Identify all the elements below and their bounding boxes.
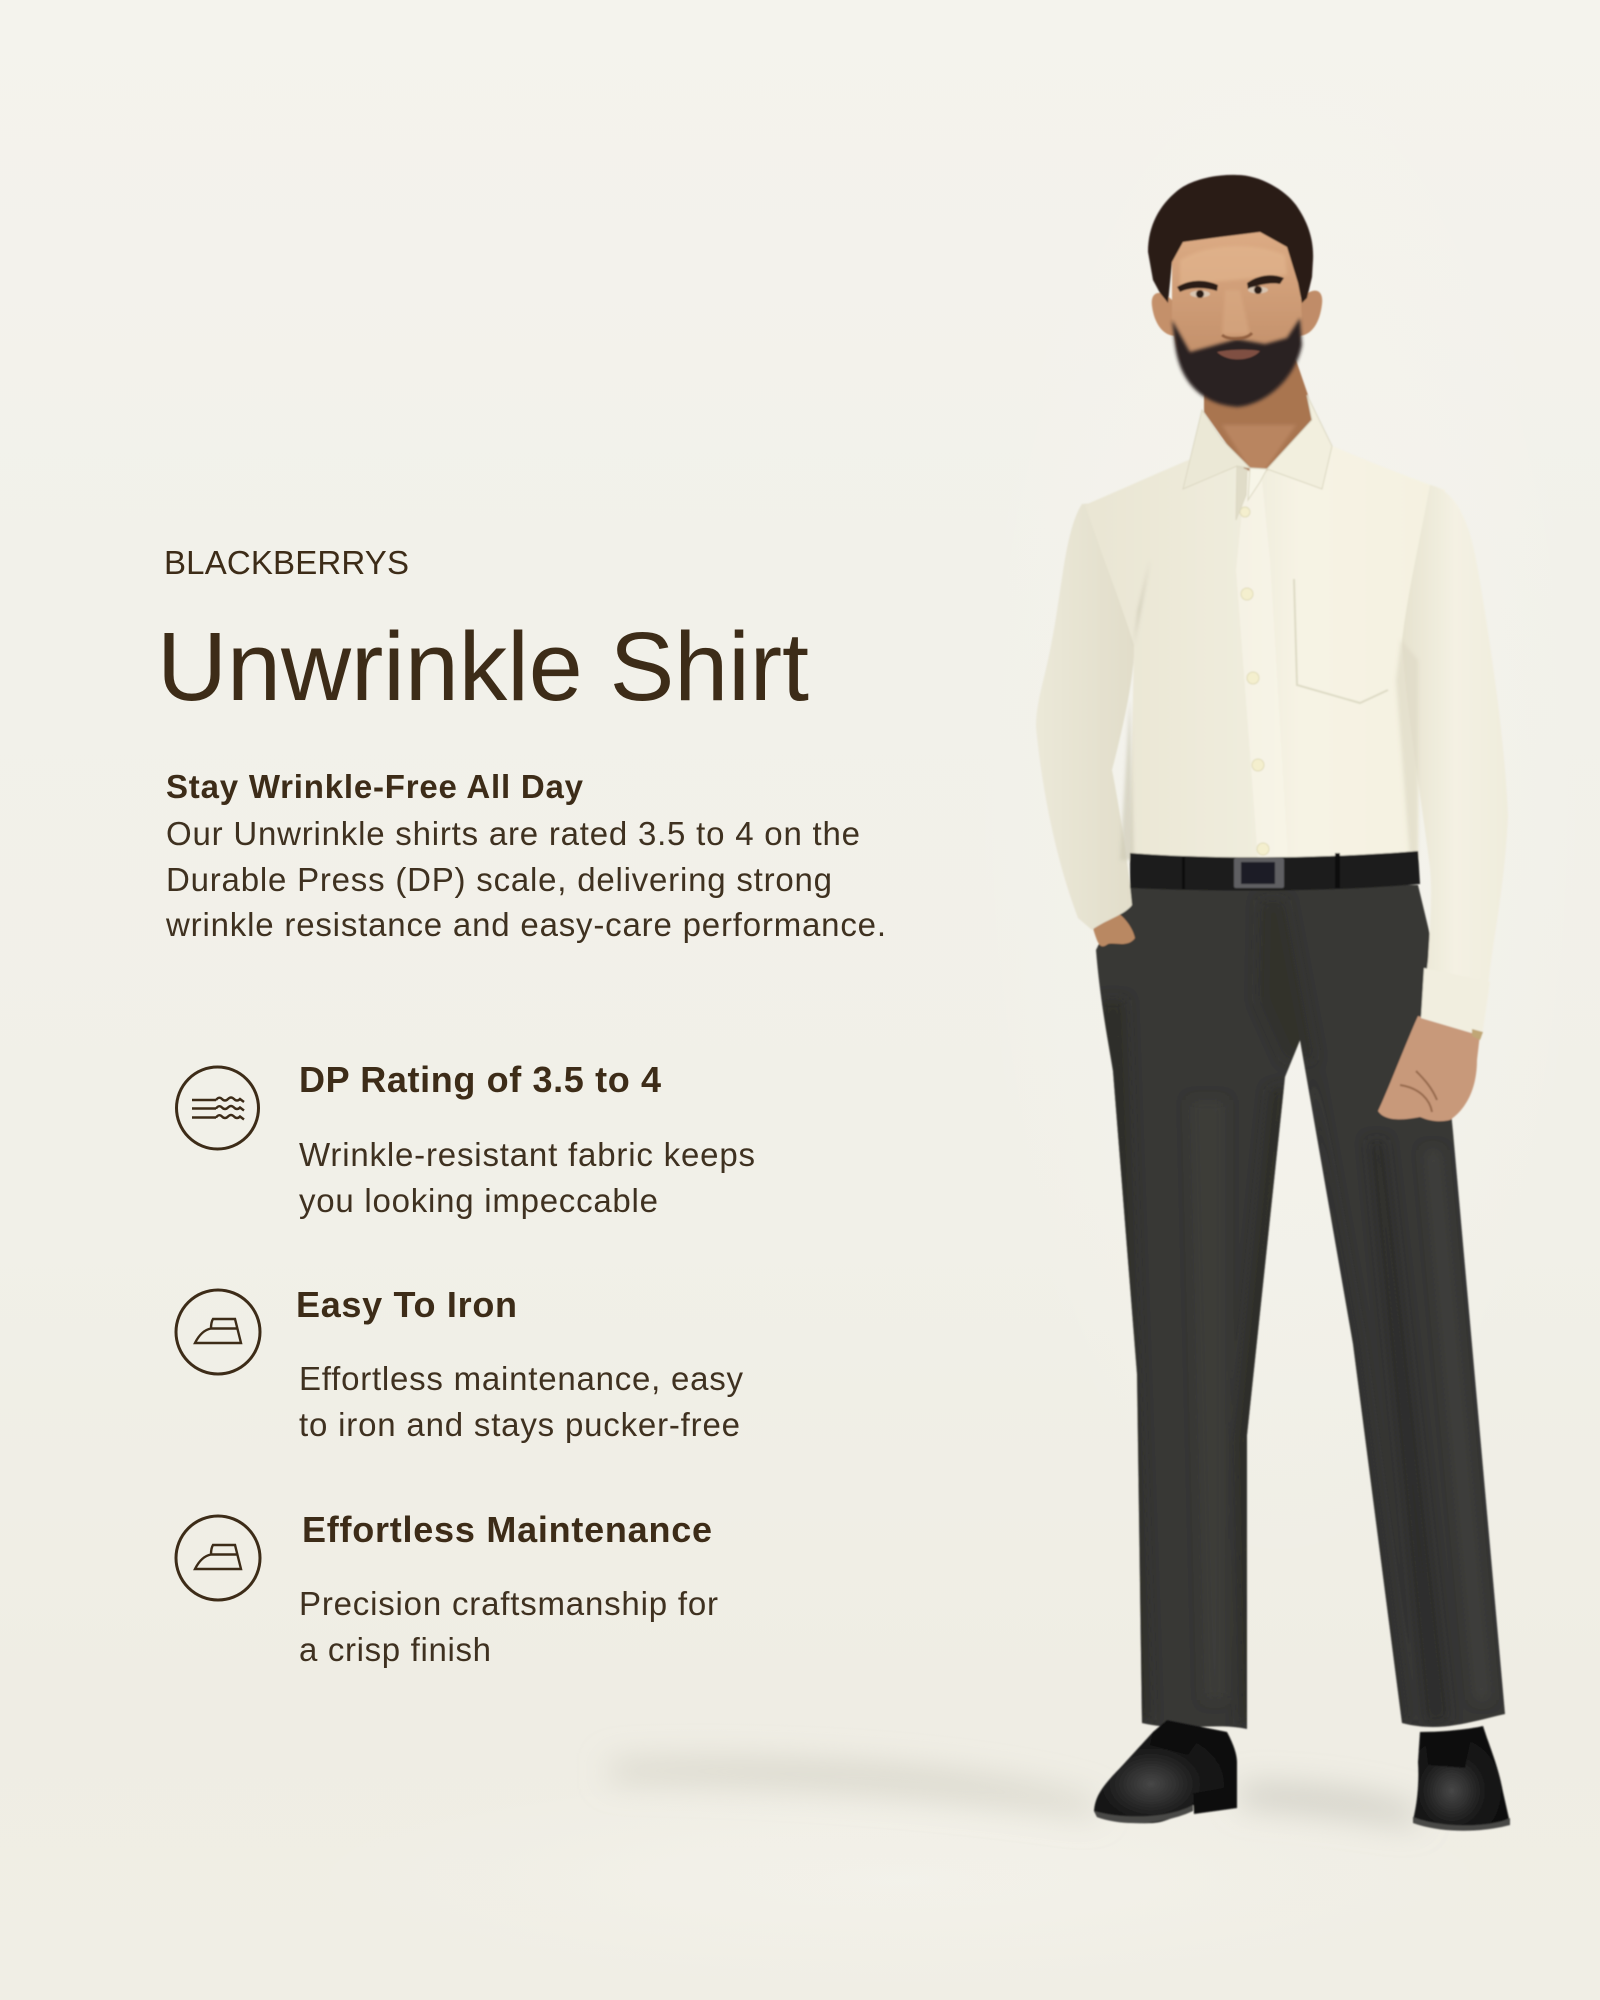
description: you looking impeccable xyxy=(299,1182,658,1219)
description: to iron and stays pucker-free xyxy=(299,1406,740,1443)
hair xyxy=(1148,175,1313,303)
icon: waves xyxy=(176,1067,258,1149)
description: Wrinkle-resistant fabric keeps xyxy=(299,1136,755,1173)
right hand xyxy=(1378,1016,1480,1121)
right sleeve xyxy=(1402,485,1508,1036)
buttons xyxy=(1240,507,1269,855)
description: Precision craftsmanship for xyxy=(299,1585,718,1622)
description: Effortless maintenance, easy xyxy=(299,1360,744,1397)
left shoe xyxy=(1094,1720,1237,1823)
icon: iron xyxy=(176,1290,260,1374)
heading: Effortless Maintenance xyxy=(302,1509,712,1550)
beard xyxy=(1172,318,1302,407)
feature: effortless maintenance xyxy=(176,1509,718,1668)
intro paragraph: Durable Press (DP) scale, delivering strong xyxy=(166,861,832,898)
description: a crisp finish xyxy=(299,1631,491,1668)
right shoe xyxy=(1413,1726,1510,1831)
heading: Easy To Iron xyxy=(296,1284,517,1325)
title: Unwrinkle Shirt xyxy=(157,612,809,721)
description xyxy=(299,1585,718,1668)
icon: iron xyxy=(176,1516,260,1600)
nose xyxy=(1222,333,1252,339)
mouth xyxy=(1217,350,1260,359)
feature: easy to iron xyxy=(176,1284,744,1443)
left hand in pocket xyxy=(1092,908,1135,946)
description xyxy=(299,1360,744,1443)
model photo illustration xyxy=(1036,175,1510,1831)
heading: DP Rating of 3.5 to 4 xyxy=(299,1059,661,1100)
intro text block xyxy=(165,768,886,943)
intro subheading: Stay Wrinkle-Free All Day xyxy=(166,768,584,805)
body xyxy=(1085,445,1445,860)
intro paragraph: wrinkle resistance and easy-care performance. xyxy=(165,906,886,943)
intro paragraph xyxy=(165,815,886,943)
trousers xyxy=(1096,885,1505,1729)
brand label: BLACKBERRYS xyxy=(164,544,409,581)
left sleeve xyxy=(1036,500,1150,930)
eyebrows and eyes xyxy=(1177,275,1284,298)
feature: DP rating xyxy=(176,1059,755,1219)
ears xyxy=(1152,293,1176,336)
belt xyxy=(1130,851,1420,891)
description xyxy=(299,1136,755,1219)
face xyxy=(1172,229,1302,406)
collar xyxy=(1183,395,1332,520)
shirt xyxy=(1036,445,1508,1040)
pocket xyxy=(1294,579,1388,703)
floor shadow xyxy=(610,1760,1420,1824)
neck xyxy=(1204,360,1318,472)
intro paragraph: Our Unwrinkle shirts are rated 3.5 to 4 on the xyxy=(166,815,860,852)
